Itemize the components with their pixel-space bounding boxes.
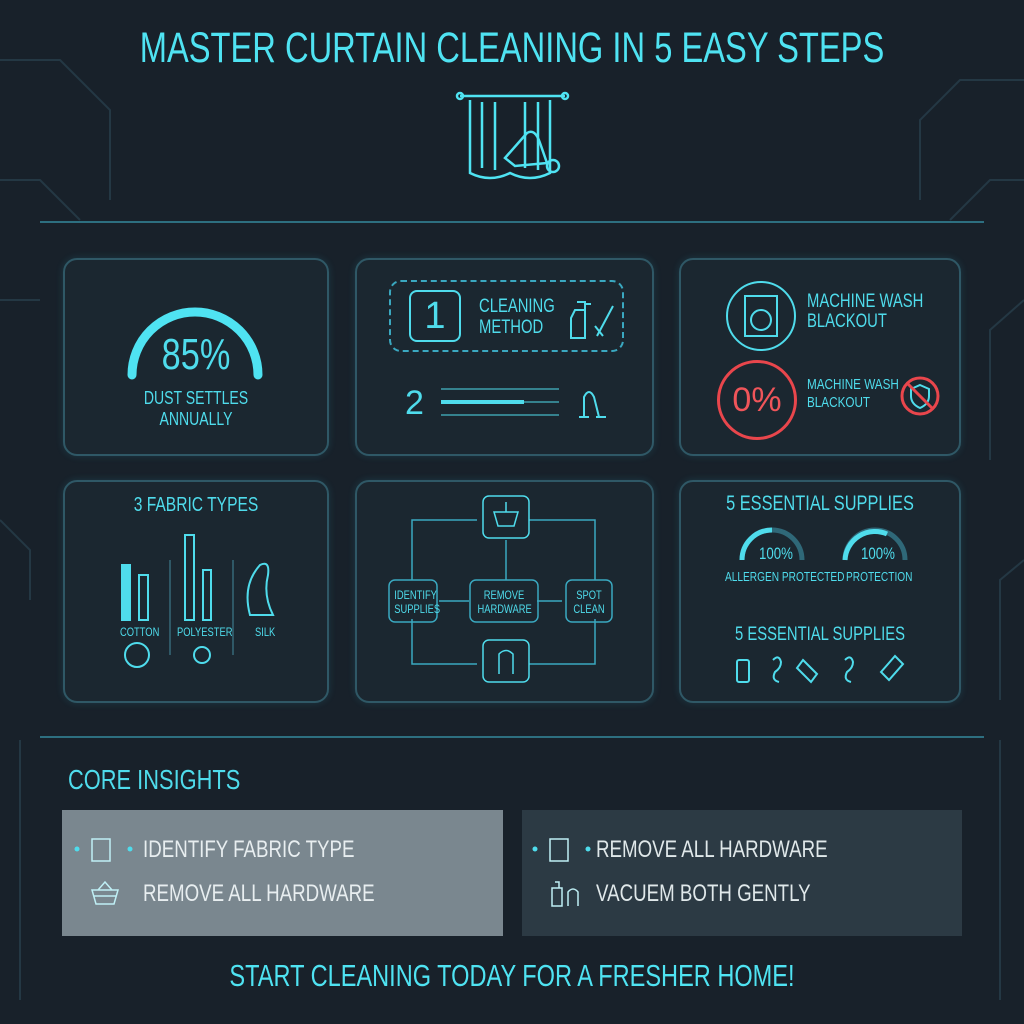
panel: machine wash: MACHINE WASH xyxy=(807,376,899,393)
panel: essential supplies: PROTECTION xyxy=(846,569,912,584)
title: MASTER CURTAIN CLEANING IN 5 EASY STEPS xyxy=(140,24,884,72)
panel: essential supplies xyxy=(679,480,961,703)
panel: flow diagram: SUPPLIES xyxy=(394,602,440,616)
panel: essential supplies: 100% xyxy=(861,544,895,563)
step 1 card: CLEANING xyxy=(479,296,555,317)
footer call to action: START CLEANING TODAY FOR A FRESHER HOME! xyxy=(229,958,795,993)
stat 0%: 0% xyxy=(732,381,782,419)
panel: fabric types: 3 FABRIC TYPES xyxy=(134,494,258,516)
bar chart xyxy=(121,534,275,668)
panel: machine wash xyxy=(679,258,961,456)
panel: flow diagram: HARDWARE xyxy=(477,602,532,616)
step 1 card xyxy=(389,280,624,352)
insight box right: VACUEM BOTH GENTLY xyxy=(596,880,811,907)
insight box left: REMOVE ALL HARDWARE xyxy=(143,880,375,907)
panel: fabric types: SILK xyxy=(255,625,275,639)
panel: fabric types xyxy=(63,480,329,703)
panel: flow diagram: REMOVE xyxy=(484,588,524,602)
gauge chart xyxy=(128,308,262,380)
step 1 card: METHOD xyxy=(479,317,543,338)
gauges xyxy=(740,528,908,560)
icon: no shield xyxy=(900,376,940,416)
panel: dust gauge xyxy=(63,258,329,456)
panel: flow diagram: CLEAN xyxy=(573,602,605,616)
panel: machine wash: BLACKOUT xyxy=(807,311,887,332)
panel: steps xyxy=(355,258,654,456)
panel: machine wash: MACHINE WASH xyxy=(807,291,923,312)
panel: essential supplies: 5 ESSENTIAL SUPPLIES xyxy=(735,624,905,645)
step 2: 2 xyxy=(405,384,424,422)
stat 0% xyxy=(717,360,797,440)
panel: machine wash: BLACKOUT xyxy=(807,394,870,411)
caption: DUST SETTLES xyxy=(144,388,248,408)
panel: essential supplies: 100% xyxy=(759,544,793,563)
panel: fabric types: POLYESTER xyxy=(177,625,232,639)
panel: flow diagram: SPOT xyxy=(576,588,602,602)
panel: fabric types: COTTON xyxy=(120,625,159,639)
panel: flow diagram: IDENTIFY xyxy=(394,588,437,602)
stat 85%: 85% xyxy=(162,330,230,379)
insight box left xyxy=(62,810,503,936)
insight box right xyxy=(522,810,962,936)
panel: flow diagram xyxy=(355,480,654,703)
panel: essential supplies: ALLERGEN PROTECTED xyxy=(725,569,844,584)
icon: washer xyxy=(726,281,796,351)
insight box left: IDENTIFY FABRIC TYPE xyxy=(143,836,355,863)
caption xyxy=(144,388,248,429)
insight box right: REMOVE ALL HARDWARE xyxy=(596,836,828,863)
step 1 card: 1 xyxy=(424,295,446,337)
heading: core insights: CORE INSIGHTS xyxy=(68,764,240,795)
panel: essential supplies: 5 ESSENTIAL SUPPLIES xyxy=(726,492,914,515)
caption: ANNUALLY xyxy=(159,409,233,429)
icon: curtain with vacuum xyxy=(456,92,570,180)
supply icons xyxy=(736,654,904,684)
icon: spray and brush xyxy=(570,301,614,339)
